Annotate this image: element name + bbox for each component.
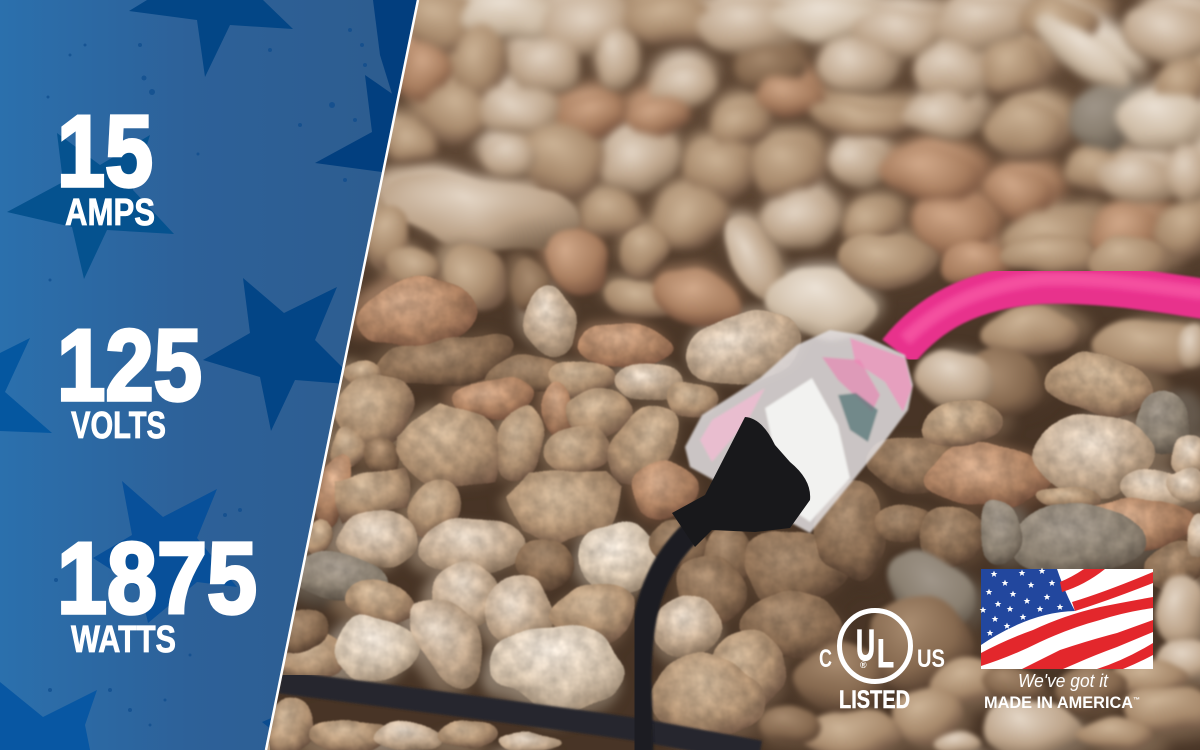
logo: cULus listed: C: [819, 645, 832, 673]
tagline: Made in America: ™: [1133, 697, 1140, 704]
stars: [0, 0, 430, 750]
logo: cULus listed: LISTED: [839, 686, 910, 714]
logo: cULus listed: ®: [860, 660, 867, 670]
panel: blue specs: [0, 0, 430, 750]
black cord: foreground: [280, 682, 760, 750]
logo: cULus listed: L: [877, 632, 894, 676]
stat: 1875 watts: 1875: [57, 523, 257, 635]
pink cord: [898, 279, 1200, 352]
stat: 125 volts: VOLTS: [71, 405, 166, 447]
plug: translucent connector: [685, 330, 913, 533]
logo: cULus listed: U: [856, 621, 875, 670]
panel edge line: [266, 0, 418, 750]
logo: cULus listed: US: [917, 645, 945, 673]
stat: 15 amps: AMPS: [65, 192, 155, 234]
logo: cULus listed: [819, 610, 945, 714]
stat: 15 amps: 15: [57, 96, 153, 208]
logo: American flag: [980, 568, 1153, 669]
black cord: plug and lead: [640, 417, 810, 750]
stat: 125 volts: 125: [57, 310, 202, 422]
grunge speckles: [46, 28, 367, 726]
tagline: Made in America: MADE IN AMERICA: [984, 694, 1135, 712]
tagline: We've got it: We've got it: [1018, 671, 1109, 691]
stat: 1875 watts: WATTS: [71, 619, 176, 661]
